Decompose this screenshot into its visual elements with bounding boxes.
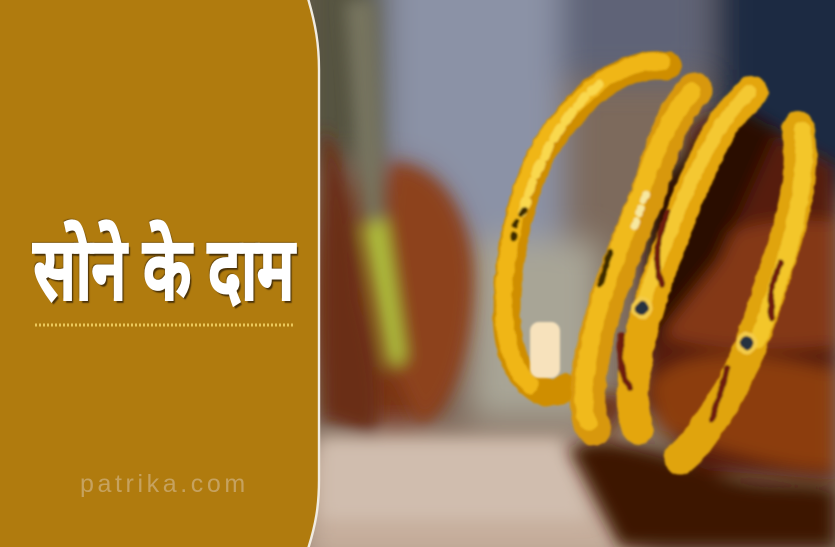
bangle 2 (584, 90, 695, 428)
fingers behind bangles (570, 105, 835, 547)
bangle 3 (620, 92, 752, 428)
bangle 4 (680, 128, 804, 458)
left brown panel with white curved edge (0, 0, 319, 547)
title: सोने के दाम (34, 223, 294, 318)
dotted divider (35, 324, 294, 326)
bangle 1 (504, 62, 668, 392)
highlight: light reflection through bangle (530, 322, 560, 378)
gold bangles (504, 62, 804, 458)
brand watermark: patrika.com (80, 470, 249, 498)
blurred writing hand and pen (320, 0, 590, 520)
